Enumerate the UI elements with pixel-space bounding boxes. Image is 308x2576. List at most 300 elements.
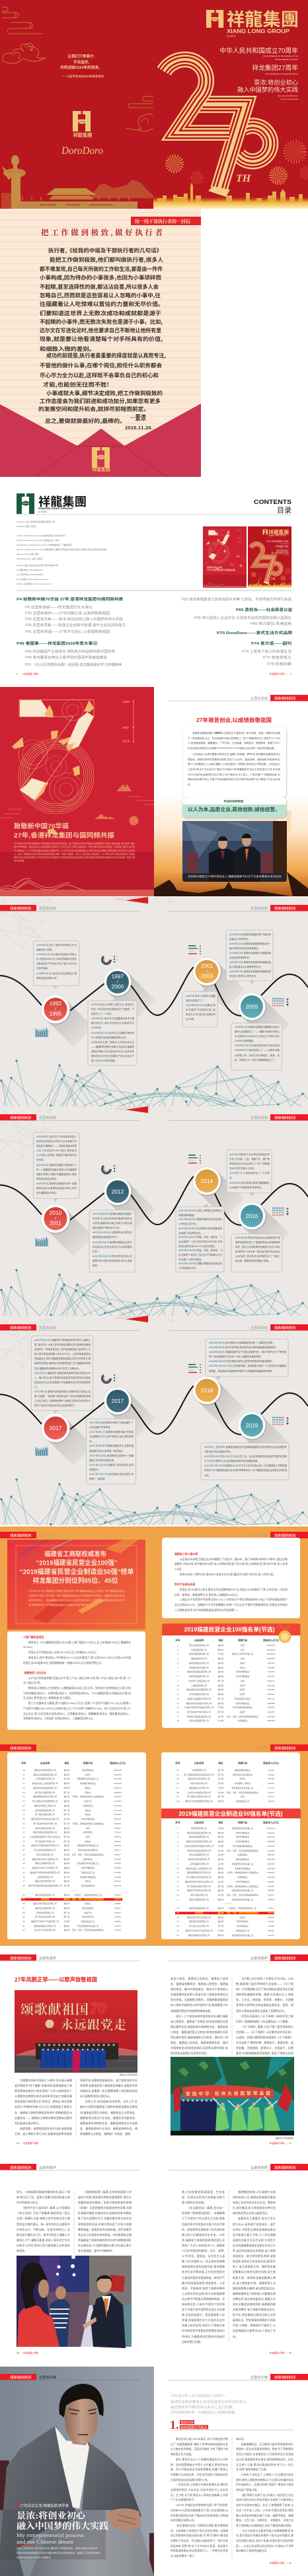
callout: 2014: ●2014年12月14日,福建好福临商会百跃连初公司商会圆大开业。 [178,1262,222,1270]
node: 2010/2011: 2011 [50,1219,61,1226]
header orange 2: 我和我的祖国 [10,1745,32,1750]
callout: 2010-2011: ●2011年1月,香港祥龙集团成为第一届福建省民营企业管理协会副会长单位,同时成为福建省会长单位。 [36,1182,77,1194]
header left overlay: 我和我的祖国 [10,2375,32,2380]
interview columns: "创业艰难百战多,"回想创业初期,景浓感慨地说。众所周知,订单是生产型企业的生命线。对刚刚成立到他的祥龙鞋业来说,能"活"得"在"都吃?景浓首先想到了老东家。不出意料,老板拒绝了。你们开来民此刻来,而是"绝"有了对方的办公室里。他这里为你的真诚所感动,你这里里前已人。一些股东办终会议,决定给景浓一笔订 [171,2524,228,2558]
callout: 1992-1995 [33,941,79,989]
portrait title block: My entrepreneurial process [17,2532,84,2538]
logo: green group mark: 祥龍集團 [38,495,87,509]
icon: gold medal [276,1622,293,1643]
slogan text: ——习近平总书记2020年新年贺词 [61,74,104,79]
red page background [0,687,154,896]
article columns page 19: 《永远跟党走》篇章,由全省一同合唱《我和我的祖国》。本篇章揭示了中国共产党从诞生之日起,就肩负起实现中华民族伟大复兴的庄严使命。团结带领全国各族人民完成民族独立和人民解放的历史任务。70年来,福建省工商联团结带领民营企业家和广大非公有制经济人士,遵循各个历史时期党的路线、方针、政策,以"听党话、跟党走、走社会主义道路"为行动指南,以一往无前的进取精神和波澜壮阔的创新实践,推进福建经济社会不断发展,正在由民营经济大省向民营经济强省转变。新时代气魄,同领发展态势受,勇担使命、斗志昂扬、不懈奋战,铸就了闽商拼搏的斗志和优秀的品格,努力在新福建建设过程中不断展示闽商精神风貌。全体闽商坚信,只有在中国共产党的领导下才能开创中国特色社会主义的道路,实现民族振兴、国家富强和人民幸福,祝福祖国在东方升起的历史时刻踏上新的征程,祝愿天下闽商在新时代新征程中用更宏和智慧合清如幻的闽风,为福建建设民营经济强省作出新的更大贡献。 [182,2206,225,2343]
red band [161,1808,301,1818]
article columns page 19: 貌,为加快建设美丽富强、生态宜居、民清法治的现代化闽省贡献力量,决策的文化实践。 [182,2190,225,2204]
report article right: 民营企业100强中21家主营业务涉足战略性新兴产业,相比2018年增加了7家,分布在新一代信息技术、新材料、新能源等行业,营业收入总额超9000亿元。 [174,1588,288,1596]
table: manufacturing top 50: 宁德市 福州市 福州市 福州市 宁德市 泉州市 泉州市 福州市 泉州市 福州市 福州市 福州市 泉州市 厦门市 福州市 泉州市 福州市 福州市 福州市 福州市 福州市 厦门市 宁德市 福州市 [217,1827,223,1937]
header left overlay [0,2374,139,2380]
node: 2016: 2016 [246,1213,258,1219]
logo: front cover group mark [206,10,299,38]
highlight row: Xianglong rank 85 [21,1898,122,1901]
company profile card: 公司创始人及现任董事长景浓先生,祖籍江苏南通。27年来,带领着祥龙集团坚持以规范化、制度化的科学发展观为指导,坚定"以人为本、高效创新、诚信经营"的经营宗旨,奉行"以发展推企人,以事业凝聚人,以信任留住人"的理念,求真务实,开拓进取。公司由创立之初的1条生产流水线已扩展至今天拥有22条具备国际先进水平的成型生产线,可实现3000万双时尚女鞋的年总生产能力,年产值过亿,外汇收入。产品外销27个国家和地区,在国际时尚女鞋市场上占据了举足轻重的地位,并在中国时尚女鞋产业中确定了行业龙头地位。 [188,752,280,786]
year timeline: 1949 [122,700,130,704]
contents list right: P74 意方道——副刊 [251,641,291,646]
network pattern [0,1059,308,1107]
page footer 17: 17 [289,2142,291,2145]
contents list right [182,597,292,666]
article columns page 17: 经过一上午紧张有序的角逐和评选,最终,福建省江西商会、福建省广东商会2家商会参赛队伍获得比赛的金奖,福建省青年闽商联合会、福建省浙江商会、福建省民营企业商会3家商会参赛队伍获得比赛的银奖,福建省徽家企业商会、福州市三明商会、福建省江苏商会、福建省旗袍协会、福州市闽南商会5家商会参赛队伍获得比赛的铜奖,其他9家商会参赛队伍获得专项奖。 [171,2015,228,2055]
header 3 right [169,1324,308,1330]
callout: 2014: ●2014年9月26日,景浓董事长荣任福建省职业经理人协会首任会长。 [178,1227,222,1234]
intro text: 七十年前,中华人民共和国成立,开启民族伟大复兴的历史征程。四十年前,改革开放大幕拉启,中国经济腾飞,福建人敢拼爱赢,"晋江经验""福州模式"影响深远。在这片热土上,祥龙集团从无到有,从小到大,见证了民族工业的成长。当代中国与世界的关系发生了深刻变化,变化之中有坚守,也有担当。二十七年来,福建祥龙始终与祖国同行。2019年,景浓先生带领集团走过27周年,将企业发展融入国家发展大局,携手员工共同奋斗。在这一特殊的时刻,我们回望来路,致敬祖国,向每一位奋斗者致敬。祥龙人以此为起点,继续前行。七十年前,中华人民共和国成立,开启民族伟大复兴的历史征程,四十年前改革开放,中国经济飞速发展,民族企业蓬勃成长,是祥龙集团与祖国同频共振的最好见证,也是每一位奋斗者最大的幸福。 [14,842,135,862]
fireworks [170,146,308,181]
photo: leader shaking hands [17,2255,132,2348]
report article right: 从区域分布来看,百强企业分布福建九个设区市。福州市、厦门市和泉州市等3个城市入围企业数量最多,共有85家,其中福州市36家,较上年增加5家;厦门市29家,较上年增加2家;泉州市20家,较上年减少5家。 [174,1557,288,1571]
article columns page 18 [17,2190,132,2254]
masthead credits: Managing Editor 主编: 范秀秀 [17,557,42,560]
header right [169,2374,308,2380]
red announcement panel: 福建省工商联权威发布 [44,1550,106,1558]
article columns page 17 [171,1976,293,2057]
report article right: 其余分布在:宁德市4家,漳州市与龙岩市均为3家,莆田市与南平市均为2家,三明市1家。 [180,1573,276,1576]
section number and title: 祖国召唤 [180,2420,194,2425]
table: top 100 first page: 1 2 3 4 5 6 7 8 9 10 11 12 13 14 15 16 17 18 [176,1644,179,1722]
node: 2019: 2019 [246,1422,258,1429]
article columns page 16 [15,2078,137,2137]
callout: 2017 second half: ●2017年11月27日,景浓董事长荣任全国工商联第十二届执委。 [89,1473,134,1480]
contents list left [17,596,126,667]
header 1 left [0,905,139,912]
table: manufacturing top 50: 营业收入(万元) [263,1761,280,1765]
masthead credits: Editor-in-Chief 总编: 林芳 [17,552,39,555]
page footers: | [21,672,22,675]
cover headlines: 70TH ANNIVERSARY OF THE FOUNDING OF THE [263,55,298,57]
report article left: "福建制造"占比过半 [23,1671,46,1674]
table: manufacturing top 50: 地区 [218,1820,223,1824]
long shadows [46,999,93,1047]
header orange 2 [0,1744,308,1751]
photo: two men at reception: 庆祝新中国成立70周年招待会上,福建省委副书记王宁与景浓董事长亲切交谈 [188,875,282,878]
header orange 1 [0,1532,308,1538]
article columns page 16: 为隆重庆祝新中国成立70周年,充分展示福建省民营经济"两个健康"发展成就,展现福建省工商联所属商会政治引领作用和广大非公有制经济人士理想信念教育实践活动成果,彰显省工商联所属商会团结引领民营企业"听党话、跟党走,商业党建走前头"的精神风貌,9月16日,由福建省工商联主办、福建省工商联所属商会承办的"颂歌献祖国,永远跟党走"——福建省工商联所属商会歌咏比赛优秀队展演在福州举行。 [15,2079,72,2125]
report article left: 榜单显示,制造业占主体地位,入围数量高达58家,占比过半。排名前十位的制造业占3家,分别为恒申集团(排名3)、永荣控股(排名7)、恒申控股(排名8)。"2019福建民营企业制造业50强"成员,全部上榜百强企业,"福建制造"实力强劲。 [23,1686,131,1699]
callout: 1997-2000: ●2000年3月31日,景浓先生与福建华隆房地产公司(现改为成投资集团有限公司)。 [91,1032,134,1039]
header 1 left: 我和我的祖国 [10,906,32,911]
header right: 这里有先锋 [250,2375,268,2380]
panel: orange ranking spread [0,1526,308,1946]
masthead credits: Email 邮箱: xlgroup@xlfootwear.com [17,577,49,581]
timeline curve [0,967,308,1016]
interview intro [171,2393,247,2415]
slogan text [60,54,104,79]
man in stripes [50,2299,70,2347]
contents list left: P20 这里有先锋——景浓:将创业初心融入中国梦的伟大实践 [25,617,123,622]
callout: 2009 early [226,930,273,984]
portrait figure [0,2384,154,2576]
table: top 100 first page: 22060503 14560001 11036432 10025644 7535750 7051565 4014012 4002429 3870144 3756000 3438858 3056462 3075433 2986688 2901126 2400367 2410004 2086356 [266,1644,276,1722]
callout: 2019: ●2019年11月19日,祥龙集团以192133万元人民币的营业收入,位列福建省工商联权威发布的"2019福建省民营企业100强"榜单第85位,"2019福建省民营企业制造业50强"第45位。 [204,1464,287,1477]
contents list right: P74 上有老下有小的幸福生活 [242,649,291,654]
callout: 2016 early: ●2016年6月,景浓董事长荣获"福建福鞋业公司和招产优秀建设者"荣誉称号。 [229,1182,270,1189]
table: manufacturing top 50: 2019福建民营企业制造业50强名单(节选) [178,1810,283,1817]
letter signature: —景浓 [130,412,146,423]
table: top 100 continued: 营业收入(万元) [110,1761,126,1765]
report article left: 第三产业整体实力最强,资产总额为1.6941万亿元,是第一产业资产总额(179.14亿元)和第二产业资产总额(1060.32亿元)之和的3倍,占三大产业资产总额的75.35%。前十位的企业中,第三产业企业占7家,分别为阳光龙净(排名1)、正荣集团(排名2)、福晟集团(排名4)、融侨集团(排名5)、永辉超市(排名6)、万科(厦门)控股(排名9)、三盛集团(排名10)。 [23,1701,131,1720]
table: manufacturing top 50: 所属行业 [238,1820,248,1824]
gold leaves [12,700,94,834]
red announcement panel: 祥龙集团分别位列85位、45位 [33,1576,118,1585]
year timeline: 2019 [122,740,130,744]
panel: timeline spread 2 [0,1106,308,1316]
header song 2 left [0,2164,139,2170]
floor [86,2304,132,2347]
right cloud ornaments [126,96,154,131]
header 2 left [0,1114,139,1120]
header orange 1: 这里有成绩 [250,1532,268,1538]
callout: 2009 early: ●2009年12月,香港祥龙集团荣获福建省纳税人税利重点企业纳税荣誉证书。 [229,961,271,968]
dark gradient text backdrop [0,2510,106,2559]
node: 1992/1995 [41,995,70,1024]
article columns page 17: 省浙江商会、福建省江苏商会、福建省江西商会、福建省安徽商会、福建省山西商会、福建省湖北商会、福州市闽南商会、福州市江南商会以及福清建材协会等19家省市县三级商会参赛队伍同台亮相。大展歌喉,用歌声、用情感歌颂祖国母亲70周年华诞和伟大的中国共产党,歌颂建国70年来福建民营经济所取得的辉煌成就。 [171,1977,228,2013]
node: 2014 [193,1167,221,1195]
panel: timeline spread 3 [0,1316,308,1526]
portrait title block [17,2503,109,2559]
Huabiao monument [1,155,26,209]
header 1 left: 这里有成绩 [39,906,56,911]
table: manufacturing top 50 [161,1752,301,1939]
portrait title block: 27年风华正茂·稳健起航领导者 [20,2503,69,2509]
report article right: 新兴产业成长迅速 [174,1583,195,1586]
node: 2016 [238,1202,266,1230]
node: 2001/2003 [193,958,221,985]
page footer 18 [17,2351,39,2354]
interview intro: 对党和政府怀有一份感恩的心,充满着感激。 [171,2410,238,2415]
header 3 right: 这里有成绩 [250,1325,268,1330]
callout: 2012: ●2012年12月7日,香港祥龙集团企业用于供应链,经认定的优秀企业为为新发展研究员一。 [93,1241,132,1253]
panel: letter [0,209,201,449]
interview intro: 福建祥龙集团董事长景浓在接受记者采访时表示, [171,2399,247,2404]
handwritten letter: 都不难发现,自己每天所做的工作和生活,都是由一件件 [40,265,163,273]
panel: portrait page [0,2367,154,2576]
TH label: TH [236,173,251,184]
portrait title block: 创业三周年前夕,我们走进行业,福建省工商联副主席、福建省鞋业商会会长, [17,2546,98,2550]
handwritten letter: 不管他的做什么事,在哪个岗位,担任什么职务都会 [40,361,162,369]
callout: 2018: ●2018年2月3日,高时代,新思维,新征程,祥龙25周年盛典盛会圆满成功。 [209,1346,278,1349]
callout: 2012: ●2012年10月13日,为回馈祥龙20周年庆,集团高层运动会盛大举行。 [93,1231,132,1238]
interview columns: 单试试。 [236,2437,247,2441]
callout: 2018: ●2018年10月29日,中共江苏省委常委、统战部部长杨岳一行,在时任中共福建省委常委、统战部部长雷春美等的陪同下,到福建祥龙集团调研考察。 [209,1365,286,1373]
header orange 1: 这里有成绩 [39,1532,56,1538]
callout: 2012 [89,1207,135,1272]
trousers [30,2520,154,2576]
header song 2 left: 这里有歌声 [39,2165,56,2170]
page footers: | [287,672,288,675]
red announcement panel [7,1540,145,1629]
stage floor [171,2131,294,2135]
year timeline: 1992 [122,726,129,730]
node: 2018: 2018 [201,1387,213,1394]
page footer 21: 21 [289,2561,291,2564]
mini chart icons [35,1445,48,1456]
gradient background [154,687,308,896]
table: manufacturing top 50: 橡胶和塑料制品业 软件和信息技术服务业 纺织业 纺织服装、服饰业 新型金属及机电设备工业 皮革、毛皮、羽毛及其制品和制鞋业 农业 农副食品加工业 [227,1769,258,1803]
header 2 right: 我和我的祖国 [274,1115,296,1120]
page footer 19: 祥龙集团27周年 [270,2351,286,2354]
callout: 1997-2000: ●2000年3月,景浓先生在福建福州投资兴建福州祥龙中,每年可完成设计女鞋系列达100000双。 [91,1017,134,1029]
node: 1992/1995: 1992 [50,1000,62,1007]
table: top 100 continued: 企业名称 [40,1761,50,1765]
article columns page 19: 省委机关工委委员,省总工会主席方向元,省民政厅党组成员、副厅长林弘,中国民主建国会福建省委员会专职副主委王宁新,九三学社福建省委员会副主任吴百宝斌,台湾民主自治同盟福建省委员会副主任吴日力争,省总商会副会长李建海,省工商联党组成员、副主席张建强,陈毅,省委统战部,省各民主党派有关处(部)室负责人,省工商联副主席、福晖悦务集团董事局主席李伯昌先同视,省工商联副主席、香港祥龙集团董事长景浓,省工商联副主席、福建玻璃工业集团副董事长曹辉,省总商会副会长,福建省路建设工程有限公司董事长黄忠腾志荣,省总商会副会长,福建大东海实业集团总裁林国栋,福建集团副总裁肖腾军,省工商联所属商会会长,秘书长,商会歌咏比赛队伍和企业家展演队伍、特别邀请来演唱员为团体代表,工商联、闽商报社干部职工,以及各闽媒体记者等共550人参加了活动。 [233,2217,276,2338]
logo: front cover group mark: 2019年刊 [227,34,235,38]
cover headlines: 中华人民共和国成立70周年 [219,46,298,55]
callout: 2009 late: ●2009年12月,香港祥龙集团在福建福州投资兴建专业高端鞋垫工厂——福建华龙鞋业有限公司,总投资约20000000元,项目达产后预计将达15000000双规模量。 [235,1026,280,1042]
contents heading: 目录 [277,506,291,515]
report article right [162,1538,300,1618]
network pattern [0,1269,308,1316]
handwritten letter [38,246,166,425]
timeline curve [0,1386,308,1435]
header 3 left: 这里有成绩 [39,1325,56,1330]
page title: 致敬新中国70华诞 [14,822,69,830]
handwritten letter: 达尔文在写进化论时,他也要求自己不断地让他所有里 [40,326,161,334]
callout: 1997-2000 [88,997,137,1065]
masthead credits: Organizer 主办: 香港祥龙集团投资有限公司 [17,520,55,523]
cover headlines: 景浓:将创业初心 [254,79,298,86]
node: 1997/2000: 1997 [112,973,124,980]
Great Wall and mountains [91,180,153,198]
node: 2010/2011: 2010 [50,1209,62,1216]
header song 1 left: 我和我的祖国 [10,1955,32,1960]
panel: interview page [169,2374,308,2564]
header 3 left: 我和我的祖国 [10,1325,32,1330]
photo: choir on red stage: 永远跟党走 [61,2017,126,2032]
callout: 2001-2003 [182,988,217,1027]
handwritten letter: 现象,就是要让他看清楚每个对手所具有的价值, [40,335,163,343]
table: top 100 first page: 综合 综合 新型化工及电气机械工业 综合 房地产 零售业 化学纤维制造业 化学纤维制造业 综合 房地产 房地产 房地产 有色金属矿采选业 化学纤维制造业 电气机械和器材制造业 房地产 皮革、毛皮、羽毛及其制品和制鞋业 食品制造业 [227,1644,258,1722]
table: top 100 continued: 所属行业 [83,1761,93,1765]
highlight row: Xianglong rank 45 [175,1912,274,1914]
contour ridge [0,878,85,890]
contents list right: P76 智者常低头 [263,655,291,660]
table: top 100 first page: 所属行业 [238,1638,248,1642]
letter signature: 2019.11.20. [125,424,153,431]
interview intro: 今年是中华人民共和国成立70周年。 [171,2393,227,2398]
interview columns: 景浓告诉记者,1992年春天,邓小平南巡途中提出了"发展是硬道理",确定了多种所有制发展的社会主义基本经济制度。正是这次南巡,才有了蓬勃个体和私营企业大发展。 [171,2437,228,2456]
header 1 right: 我和我的祖国 [274,906,296,911]
handwritten letter: 的发展空间和提升机会,就拼尽前程而前定。 [38,405,149,413]
photo caption left: 福建省江苏商会歌友 [120,2073,137,2076]
logo: green group mark: XIANGLONG GROUP [38,507,73,510]
management philosophy box: 祥龙的经营家屋: [224,799,244,803]
red tab [131,217,201,225]
node: 1997/2000: 2000 [112,983,124,989]
report article left: 百强企业平均营业收入达到155.2亿元,比上年增加41.15亿元。 [28,1651,98,1654]
callout: 2017 first half: ●2017年2月21日,福建扶贫·揭阳就读扶贫开发中心援助儿童,"景浓同心"大爱儿童专项基金捐赠仪式在香港祥龙集团总部举行。董事长景浓在上海市慈善基金会"景浓同心"大爱儿童专项基金捐赠人民币100万元。上海市慈善基金会党组副会长,顾问,福建省党委基金委会名誉主任李家文,福建省商务委会,闽南投行及其基层组织工作,福建省商务委员会,福建省祥龙集团400名干部员工出席活动。 [34,1339,91,1370]
node: 2017 dark [104,1387,131,1415]
report article left [7,1631,145,1730]
cover headlines [219,46,299,100]
orange background [0,1526,308,1946]
node: 2019 [238,1412,266,1439]
article columns page 17: 当天晚上的大戏院,人头攒动,灯光闪烁。20点整,随着第六届世界闽商大会会歌——《天下闽商》大合唱奔腾,拉开了商业歌咏比赛优秀队伍展演新视觉盛宴的序幕。随着,在欢度仪式上,周勇亮、王光远、林旭奋、李家荣、林敏先、马丽敬等领导为获得本次商会歌咏比赛金奖、银奖、铜奖的10家商会参赛队伍颁发了奖牌和证书。 [236,1977,293,2013]
node: 2001/2003: 2003 [201,972,213,979]
callout: 2017 second half: ●2017年5月,景浓董事长荣获江苏省南通市"十大杰出通商"荣誉称号。 [89,1421,134,1429]
header 2 right [169,1114,308,1120]
table: manufacturing top 50: 11036432 4014012 4002429 2986688 2901126 2410004 2086356 2051358 2030636 2022499 1844264 1210553 860203 835368 655585 636017 630552 154507 192133 186965 184047 174922 169592 162757 [266,1827,276,1937]
photo: two men at reception [182,821,287,882]
table: manufacturing top 50: 木林森有限公司 厦门市美亚柏科信息股份有限公司 福建省四方投资有限公司 利郎(中国)有限公司 福建雅鑫企业有限公司 兴业皮革科技股份有限公司 厦门国贸东润股份有限公司 福建天马科技集团股份有限公司 [184,1769,214,1803]
section number and title [170,2418,293,2431]
headline: 27年艰苦创业,以成绩致敬祖国 [196,717,272,723]
logo: front cover group mark: 祥龍集團 [227,10,299,30]
header orange 1: 我和我的祖国 [10,1532,32,1538]
page footers: 3 [290,672,291,675]
contents list right: P65 勇担当——社会慈善公益 [236,607,292,612]
header song 1 right [169,1954,308,1961]
callout: 2018: ●2018年6月6日,应福建省委书记于伟国,省委副书记、福州市委书记王宁等的陪同下,前来福建省书记来到一行深入福建祥龙集团考察。 [209,1351,286,1358]
portrait title block: 融入中国梦的伟大实践 [17,2521,109,2531]
table: top 100 continued: 通讯和其他业 房地产 新型金属及机电设备工业 非金属矿物制品业 服装业 批发业 计算机、通信和其他电子设备制造业 房地产业 房屋建筑业 零售业 批发业 化学纤维制造业 计算机、通信和其他电子设备制造业 综合 房屋建筑业 综合 批发业 新型金属及机电设备工业 软件和信息技术服务业 皮革、毛皮、羽毛及其制品和制鞋业 房屋建筑业 新型金属及机电设备工业 化学纤维制造业 农副食品加工业 非金属矿物制品业 纺织业 专用设备制造业 石油加工、炼焦和核燃料加工业 皮革、毛皮、羽毛及其制品和制鞋业 纺织业 通讯和其他业 房地产业 批发和零售业 农副食品加工业 有色金属和机电设备工业 皮革、毛皮、羽毛及其制品和制鞋业 [72,1769,104,1931]
table: manufacturing top 50: 93 94 95 96 97 98 99 100 [176,1769,180,1803]
page footer 18: 18 [17,2351,19,2354]
header bar: 这里有成绩 [250,696,268,701]
article columns page 18: 同行、与新福建同砥砺的精神状态,展示了闽商"敢为天下先、爱拼才会赢"的闯劲和奋斗新时代的使命与担当。 [17,2190,70,2204]
table: manufacturing top 50: 恒申集团有限公司 福建永荣控股集团有限公司 恒申控股集团有限公司 福建省世纪海投股份有限公司 宁德时代新能源科技股份有限公司 安踏体育用品集团有限公司 达利食品集团有限公司 福建省华通商贸有限公司 三安集团股份有限公司 福建省冶金工业集团有限公司 福建星网锐捷通讯有限公司 伟大(福建)海洋集团有限公司 福建百宏聚纤科技实业有限公司 厦门宏发电声股份有限公司 福建凯天环保科技有限公司 特步(中国)有限公司 福建亿通钢铁有限公司 福建景程控股有限公司 祥龙集团 福建龙净环保实业有限公司 福建恒达集团有限公司 厦门恒兴实业有限公司 福建新亨海洋水产食品有限公司 福建省闽盛实业有限公司 [184,1827,214,1937]
handwritten letter: 和细致入微的差别。 [40,345,95,353]
callout: 2009 early: ●2009年10月,香港祥龙集团获得福州第一届环境保护协会常务理事单位。 [229,943,271,950]
masthead credits: Fax 传真号码: 0591-83436400 [17,573,44,576]
page title: 27年,香港祥龙集团与国同频共振 [14,832,115,840]
ring pattern of seven [19,699,94,814]
node: 1997/2000: / [117,980,118,984]
callout: 2016 early [227,1150,272,1196]
article columns page 16: 金秋九月,秋风送爽,阳光和煦。当天上午,在福州大戏院的福建省工商联所属商会歌咏比赛现场,福建省民营企业商会、福建省女企业家商会、福建省清洁保洁行业协会、福建医用设备商会、福建省青年闽商联合会、福建省闽商异业交流商会、福建省建材行业协会、福建省旗袍协会、福建省徽家企业商会、福建省广东商会、福建 [80,2100,137,2135]
contents list left: P51 《仓山区劳模风采展》巡回展 祥龙集团组织学习劳模精神 [25,662,122,667]
network pattern [0,1478,308,1526]
cover thumbnail: 7 artwork [203,526,247,588]
interview intro: 最近他时常回顾创业以来自己走过的路, [171,2404,233,2410]
interview columns: "为什么有家企业都用中国人的精神图腾'龙'命名,是不是因为你偶龙的情怀?"面对这样的疑问,景浓总是报以微笑,没有人知道,其背后更为深层的原因——让自己永远明记创业的初心:打造有立于世界鞋业巅丰之林的民族鞋业品 [236,2529,293,2552]
long shadows [46,1418,93,1466]
masthead credits: Address 地址: 福州市仓山区城门镇东南路118号 [17,563,58,567]
slogan text: 让我们只争朝夕, [67,54,95,59]
decorative cloud lines top left [2,7,43,34]
song heading: 27年风鹏正举——以歌声致敬祖国 [15,1976,97,1983]
DoroDoro logo: DoroDoro [61,145,103,157]
mini chart icons [35,1236,48,1246]
interview columns: 彼时,景浓正在从人人羡慕的美国好司公司供职。因外国管理者对中国人心怀偏见,景浓早有去意。邓小平南巡讲话,犹如和煦春风,吹醒了景浓心中那颗已久的创业梦。于是,他不顾家人和朋友的反对,毅然辞去这份高薪白领的工作。 [171,2458,228,2482]
callout: 2014 [176,1203,224,1272]
header left overlay: 这里有先锋 [39,2375,57,2380]
Tiananmen gate [17,188,137,209]
portrait background [0,2367,154,2576]
photo: choir on red stage: 福建省工商联所属商会歌咏比赛 [43,2028,112,2034]
table: top 100 first page: 企业名称 [194,1638,204,1642]
callout: 2019: ●2019年10月22日至11月4日,仓山区总工会、仓山区劳动模范协会组织开展的纪念新七十年·奋斗新时代-仓山区劳模风采展,在祥龙集团巡展。 [204,1455,287,1462]
node: 2001/2003: / [206,970,208,974]
contents list left: P6 这里有成绩——祥龙集团历年大事记 [25,605,93,610]
callout: 2012: ●2012年6月22日,香港祥龙集团在福建产权交易中心成功收购投资集团环球布匹业贸易,福建新祥龙鞋业有限公司成为香港祥龙集团下属全资子公司。 [93,1213,132,1229]
header song 1 left [0,1954,139,1961]
management philosophy box: 以人为本,品质立业,高效创新,诚信经营。 [188,806,280,812]
table: manufacturing top 50: 新型金属及机电设备工业 化学纤维制造业 化学纤维制造业 化学纤维制造业 电气机械和器材制造业 皮革、毛皮、羽毛及其制品和制鞋业 食品制造业 通用设备制造业 新型金属及机电设备工业 非金属矿物制品业 计算机、通信和其他电子设备制造业 房屋制造业 化学纤维制造业 计算机、通信和其他电子设备制造业 新型金属及机电设备工业 皮革、毛皮、羽毛及其制品和制鞋业 新型金属及机电设备工业 石油加工、炼焦和核燃料加工业 皮革、毛皮、羽毛及其制品和制鞋业 纺织业 通讯和其他业 皮革和制品业 农副食品加工业 新型金属及机电设备工业 [227,1827,258,1937]
node: 2010/2011: / [55,1217,56,1221]
red tab: 给一线干部执行者的一封信 [135,218,190,225]
panel: contents page [17,493,292,675]
handwritten letter: 尽心尽力全力以赴,这样既不会辜负自己的初心和 [40,371,159,379]
handwritten letter: 才能,也能创无往而不胜! [43,380,109,388]
cream ornament behind boxes [248,811,291,834]
header song 2 right: 这里有歌声 [250,2165,268,2170]
table: manufacturing top 50: 所属行业 [238,1761,248,1765]
handwritten letter: 不起眼的小事件,而无数次失败也是源于小事。比如, [40,318,163,326]
node: 2018 [193,1377,221,1404]
header 2 right: 这里有成绩 [250,1115,268,1120]
callout: 2017 first half: ●2017年3月,福建扶贫·闽福资助贫困青年就业资助达400人。福州市仓山区与贫困市临高县东西部扶贫协作对接暨临高县赴仓山区劳务管理工作运输推动活动在祥龙集团举行。 [34,1372,91,1388]
masthead credits: Vice-Director of Editorial Committee 编委会副主任: 丁敏刚,薛平 [17,543,72,546]
table: top 100 continued: 19 20 21 22 23 24 25 26 27 28 29 30 31 32 33 34 35 36 37 38 39 40 41 42 43 44 45 84 85 86 87 88 89 90 91 92 [22,1769,25,1931]
header orange 2: 这里有成绩 [250,1745,268,1750]
page footer 16: 祥龙集团27周年 [23,2141,39,2145]
callout: 2010-2011 [33,1132,79,1201]
masthead credits: Director of Editorial Committee 编委会主任: 景浓 [17,538,59,542]
contents list left: P36 这里有思路——加强企业创新与管理 提升企业抗风险能力 [25,623,126,627]
cover headlines: PEOPLE'S REPUBLIC OF CHINA [275,59,298,61]
handwritten letter: 成功的前提是,执行者最重要的择度就是认真而专注, [46,351,166,359]
header song 1 right: 这里有歌声 [250,1955,268,1960]
callout: 2001-2003: ●2003年6月13日,祥龙鞋业"祥龙"正规的广东东莞成立第二家研发中心,年开发设计女鞋系列达200款。 [186,1004,215,1020]
letter signature [125,412,153,431]
callout: 2019 [201,1439,289,1480]
interview columns: "我们哥哥力证明了自己的能力,"谈及往后,记在说质东源在内的众多知名鞋企业改变了对景浓和企业的许多固有的偏见。此后,订单慢慢多了起来,企业也一步步走上正轨。27年来,尽管历经风雨,景浓都以非常宏伟的能力做了过来。福建宇翔龙、福建腾龙、江西飞龙、河南祥龙、河南聚龙、河南大龙等大型制鞋企业相继诞生,组合了集团的事业版图。 [236,2493,293,2527]
table: manufacturing top 50: 1 2 3 4 5 6 7 8 9 10 11 12 13 14 15 16 17 44 45 46 47 48 49 50 [176,1827,179,1937]
crowd [46,2292,89,2347]
page footer 16: 16 [17,2142,19,2145]
table: manufacturing top 50: 地区 [218,1761,223,1765]
node: 2009: 2009 [246,1003,258,1010]
mini chart icons [35,1026,48,1037]
panel: envelope [0,404,201,477]
contents heading [254,499,291,515]
callout: 1997-2000: ●1997年,祥龙公司奉行"品质立业",景浓先生在这一年亲自抓完全控制的生产,把品质、产品档次上了一个台阶。 [91,1003,134,1015]
portrait title block: 景浓:将创业初心 [17,2511,87,2521]
callout: 2018 [206,1339,288,1380]
sofa [0,2460,154,2576]
handwritten letter: 小事构成,因为待办的小事很多,也因为小事琐碎而 [40,273,161,281]
callout: 2016 early: ●2016年7月,江西南城祥龙工厂正式营业。 [229,1172,270,1179]
page footers: 祥龙集团27周年 [270,672,286,675]
logo: green group mark [17,493,87,514]
header 3 right: 我和我的祖国 [274,1325,296,1330]
page footers: 祥龙集团27周年 [23,672,39,675]
cover headlines: 27TH ANNIVERSARY OF XIANGLONG GROUP [265,73,298,75]
callout: 1997-2000: ●总投资成立第二家鞋业公司暨合资企业——福建新祥龙鞋业有限公司(后改为福建祥龙鞋业有限公司),总投资2000万元,具有多条国际先进水平的专业制鞋生产流水线,年生产能力可达450万双时尚鞋。 [91,1041,134,1062]
interview columns: 1992年,怀揣创业的梦想和为国人争气的愿望,在仅有420元资金的艰难情况下,经三位长辈相助,26岁的景浓毅然告别办了福州祥丰贸易有限公司和福州祥龙鞋业有限公司。 [171,2503,228,2522]
cream peony patches [20,700,94,800]
slogan text: 共同迎接2020年的到来。 [60,65,102,70]
contents list right: P70 DoroDoro——意式生活方式品牌 [217,630,292,635]
page footer 16: | [21,2142,22,2145]
page footer 18: | [21,2351,22,2354]
contents list right: P78 回家的路 [267,662,291,666]
table: manufacturing top 50: 序号 [175,1761,180,1765]
panel: company profile page [154,687,308,896]
table: top 100 continued: 地区 [64,1761,69,1765]
jacket right [82,2442,141,2517]
callout: 2017 second half: ●2017年6月5日,好福临创建四开业,这是好福临新模式事业合作的第一家试验店。 [89,1445,134,1452]
cover background [0,0,308,209]
node: 2009 [238,993,266,1020]
report article left: 榜单显示,"2019福建省民营企业100强"入围门槛是15.06亿元,比上年增加5.06亿元,增幅高达50.06%。 [23,1641,131,1649]
